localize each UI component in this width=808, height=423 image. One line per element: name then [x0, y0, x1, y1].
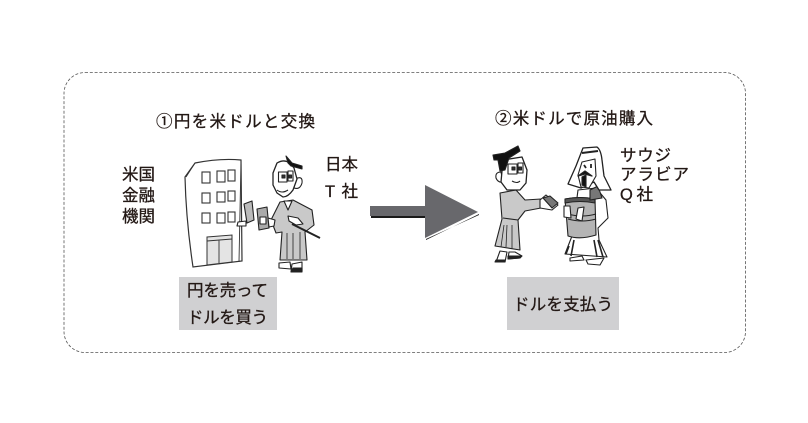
label: US financial institution: 機関 [122, 207, 155, 226]
callout: pay dollars [507, 277, 619, 330]
label: Saudi Arabia Q company: アラビア [620, 165, 689, 184]
icon: samurai paying dollars [493, 146, 558, 262]
label: US financial institution [122, 165, 155, 226]
label: Japan T company: 日本 [325, 155, 358, 174]
icon: samurai holding banknotes [237, 156, 320, 272]
label: US financial institution: 金融 [122, 186, 155, 205]
panel: dashed frame [64, 72, 746, 352]
label: Saudi Arabia Q company [620, 146, 689, 204]
icon: bank building [185, 159, 242, 267]
label: US financial institution: 米国 [122, 165, 155, 184]
callout: sell yen, buy dollars [179, 277, 277, 330]
label: Saudi Arabia Q company: サウジ [620, 146, 671, 165]
callout: sell yen, buy dollars: ドルを買う [187, 308, 268, 327]
heading: step 1: ①円を米ドルと交換 [156, 112, 315, 131]
callout: sell yen, buy dollars: 円を売って [187, 281, 268, 300]
label: Saudi Arabia Q company: Q 社 [620, 185, 654, 204]
callout: pay dollars: ドルを支払う [513, 295, 613, 314]
label: Japan T company: T 社 [325, 182, 358, 201]
label: Japan T company [325, 155, 358, 201]
heading: step 2: ②米ドルで原油購入 [495, 109, 653, 128]
arrow: step 1 to step 2 [370, 185, 479, 240]
icon: Arab oil seller with barrel [564, 147, 611, 265]
